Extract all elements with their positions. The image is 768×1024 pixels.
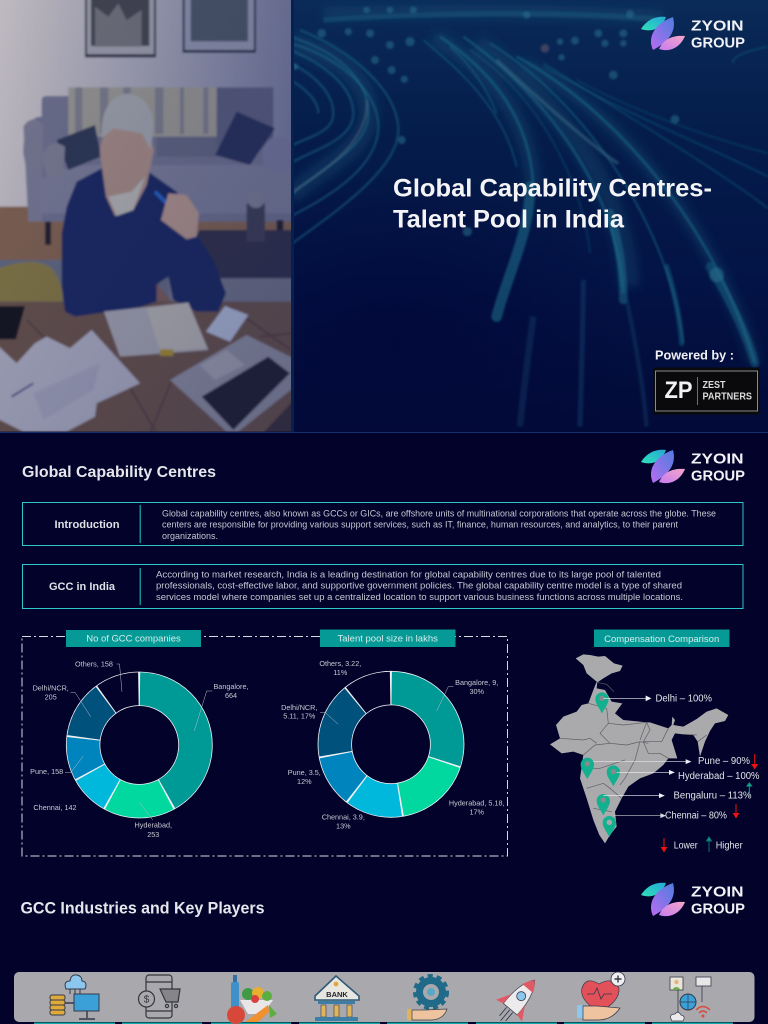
hero background: fibre optic light streaks: [290, 0, 768, 432]
zyoin logo: section two: [641, 450, 745, 484]
donut chart: talent pool size: Chennai, 3.9,: [322, 812, 365, 822]
donut chart: talent pool size: 17%: [469, 808, 485, 817]
chart tag: talent pool: [320, 630, 456, 647]
chart tag: compensation comparison: [594, 630, 730, 647]
zyoin logo: section three: [641, 883, 745, 918]
donut chart: talent pool size: 13%: [336, 822, 351, 831]
donut chart: talent pool size: 11%: [333, 668, 348, 677]
powered by label: Powered by :: [655, 348, 734, 362]
arrow: hyderabad higher: [747, 783, 752, 797]
donut chart: talent pool size: 30%: [469, 687, 485, 696]
donut chart: no of gcc companies: [30, 660, 249, 839]
pin: pune: [581, 758, 594, 779]
arrow: bengaluru lower: [734, 804, 738, 818]
icon: mobile shopping: $: [144, 994, 150, 1006]
arrow: chennai: [613, 814, 665, 818]
section heading: global capability centres: Global Capability Centres: [22, 464, 216, 481]
chart tag: compensation comparison: Compensation Comparison: [604, 634, 719, 645]
map label: bengaluru: Bengaluru – 113%: [674, 790, 752, 802]
panel: introduction: Introduction: [54, 519, 120, 531]
donut chart: no of gcc companies: 205: [45, 692, 57, 702]
donut chart: no of gcc companies: Hyderabad,: [135, 820, 172, 830]
hero bottom rule: [0, 432, 768, 433]
panel: gcc in india: professionals, cost-effective labor, and supportive government policies. The global capability centre model is a type of shared: [156, 580, 682, 590]
zest partners logo: [654, 368, 760, 414]
chart tag: no of gcc companies: [66, 630, 201, 647]
donut chart: talent pool size: Others, 3.22,: [319, 659, 361, 668]
hero title: Global Capability Centres-: [393, 174, 712, 202]
donut chart: no of gcc companies: Chennai, 142: [33, 803, 77, 812]
icon: cloud data and computer: [50, 975, 99, 1019]
zest partners logo: ZEST: [702, 380, 726, 391]
zyoin logo: section three: ZYOIN: [691, 884, 744, 900]
photo sofa: [23, 87, 303, 245]
icon: networking and telecom: [670, 977, 711, 1021]
photo coffee table and french press: [170, 202, 291, 300]
donut chart: no of gcc companies: Others, 158: [75, 660, 113, 668]
donut chart: talent pool size: Pune, 3.5,: [288, 768, 321, 777]
map label: chennai: Chennai – 80%: [665, 810, 727, 822]
photo notebook: [104, 303, 208, 357]
zyoin logo: hero: GROUP: [691, 36, 745, 52]
donut chart: talent pool size: [281, 659, 505, 831]
india map with city pins: [550, 654, 728, 843]
map label: hyderabad: Hyderabad – 100%: [678, 771, 760, 782]
panel: introduction: centers are responsible for providing various support services, such as IT, finance, human resources, and analytics, to their parent: [162, 520, 678, 530]
photo laptop: [170, 335, 303, 432]
icon: rocket: [488, 969, 548, 1024]
legend: lower and higher: Lower: [674, 840, 698, 852]
photo dark right edge: [291, 0, 294, 432]
photo floor: [0, 207, 303, 262]
donut chart: no of gcc companies: 664: [225, 691, 237, 700]
donut chart: talent pool size: Bangalore, 9,: [455, 678, 498, 687]
donut chart: talent pool size: Hyderabad, 5.18,: [449, 798, 505, 808]
zyoin logo: hero: [641, 17, 745, 52]
photo pouf: [0, 262, 63, 302]
pin: bengaluru: [597, 794, 610, 815]
industries icon bar: [14, 972, 754, 1022]
arrow: bengaluru: [603, 794, 664, 798]
panel: introduction: organizations.: [162, 531, 218, 541]
donut chart: talent pool size: Delhi/NCR,: [281, 703, 317, 712]
zyoin logo: section two: ZYOIN: [691, 452, 744, 468]
map label: delhi: Delhi – 100%: [656, 694, 712, 704]
hero title: [393, 174, 712, 234]
arrow: pune: [593, 760, 691, 764]
pin: chennai: [603, 816, 616, 837]
map outline: [550, 654, 728, 843]
panel: gcc in india: According to market research, India is a leading destination for global capability centres due to its large pool of talented: [156, 570, 661, 580]
icon: gear and hand: [407, 976, 447, 1020]
photo tint: [0, 0, 291, 432]
arrow: delhi: [603, 696, 651, 701]
donut chart: no of gcc companies: Bangalore,: [213, 682, 249, 691]
arrow: hyderabad: [617, 770, 674, 774]
teal tabs below icon bar: [34, 1022, 733, 1024]
donut chart: no of gcc companies: Pune, 158: [30, 767, 63, 776]
pin: delhi: [595, 692, 609, 713]
panel: introduction: [22, 502, 743, 546]
photo table: [0, 302, 303, 442]
zyoin logo: section two: GROUP: [691, 468, 745, 484]
chart tag: no of gcc companies: No of GCC companies: [86, 634, 181, 644]
icon: healthcare: [577, 972, 625, 1020]
donut chart: no of gcc companies: Delhi/NCR,: [33, 684, 69, 692]
arrow: pune lower: [752, 754, 757, 768]
panel: gcc in india: services model where companies set up a centralized location to support various business functions across multiple locations.: [156, 592, 683, 602]
hero title: Talent Pool in India: [393, 206, 625, 234]
map label: pune: Pune – 90%: [698, 756, 750, 767]
legend: lower and higher: [662, 837, 743, 852]
icon: mobile shopping: [138, 975, 180, 1018]
photo frames: [85, 0, 256, 57]
photo papers: [0, 330, 140, 432]
icon: bank: BANK: [326, 990, 348, 999]
photo wall: [0, 0, 303, 213]
photo man: [62, 93, 226, 317]
dashed chart panel: [22, 636, 508, 856]
pin: hyderabad: [607, 765, 620, 786]
photo phone: [0, 306, 25, 339]
icon: bank: [315, 976, 359, 1021]
zyoin logo: hero: ZYOIN: [691, 18, 744, 34]
panel: introduction: Global capability centres, also known as GCCs or GICs, are offshore units of multinational corporations that operate across the globe. These: [162, 508, 716, 518]
section heading: gcc industries: GCC Industries and Key Players: [20, 900, 264, 918]
zyoin logo: section three: GROUP: [691, 902, 745, 918]
panel: gcc in india: [22, 564, 743, 608]
donut chart: talent pool size: 5.11, 17%: [283, 712, 316, 721]
donut chart: talent pool size: 12%: [297, 777, 312, 786]
donut chart: no of gcc companies: 253: [147, 830, 159, 839]
icon: food and beverage: [227, 975, 277, 1024]
zest partners logo: PARTNERS: [702, 392, 752, 402]
hero photo: man working at a table: [0, 0, 303, 442]
panel: gcc in india: GCC in India: [49, 581, 116, 593]
zest partners logo: ZP: [664, 377, 692, 404]
legend: lower and higher: Higher: [716, 840, 743, 852]
chart tag: talent pool: Talent pool size in lakhs: [338, 634, 438, 644]
